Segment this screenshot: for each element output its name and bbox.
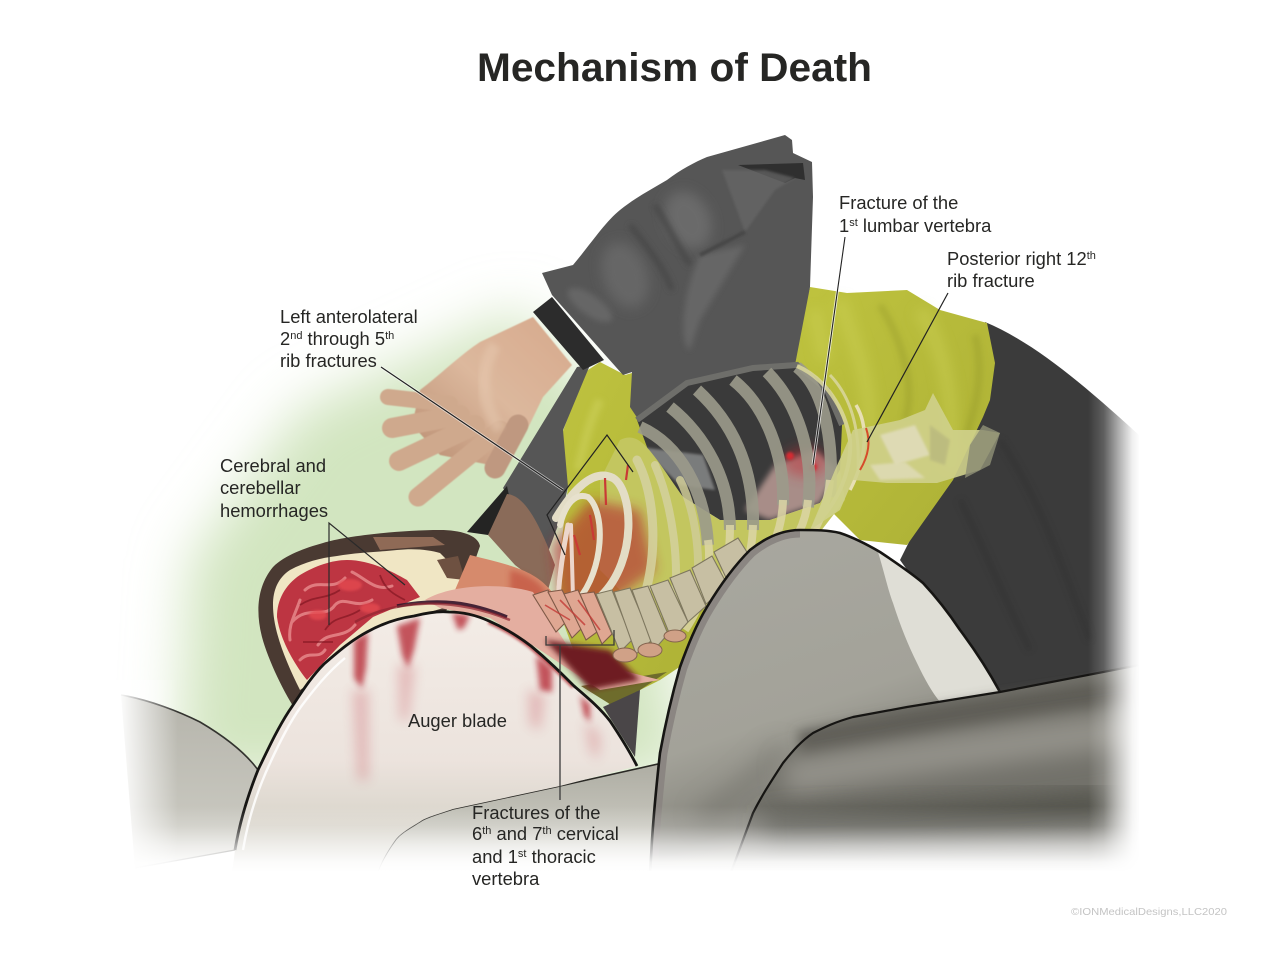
cervical and thoracic spine [425,538,752,690]
leader line: 12th rib [867,293,948,442]
translucent lumbar spine [810,393,1000,530]
label: lumbar vertebra: Fracture of the [839,192,958,213]
left background auger flight [121,695,258,868]
label: lumbar vertebra: lumbar vertebra [858,215,992,236]
translucent posterior rib cage [600,365,864,630]
label: lumbar vertebra: st [849,217,858,229]
farmer's trousers [900,322,1150,700]
leader line: hemorrhages [329,523,405,625]
edge fade overlays [60,300,1240,901]
label: cervical fractures: st [518,848,526,860]
label: 12th rib: Posterior right 12 [947,248,1087,269]
farmer's jacket [467,135,813,590]
label: left ribs: rib fractures [280,350,377,371]
label: hemorrhages: hemorrhages [220,500,328,521]
label: hemorrhages: Cerebral and [220,455,326,476]
right auger blade [650,530,1000,875]
label: auger blade: Auger blade [408,710,507,731]
label: cervical fractures: and 1 [472,846,518,867]
background: soft green glow [178,310,690,780]
title: Mechanism of Death [477,46,872,90]
label: lumbar vertebra: 1 [839,215,849,236]
label: 12th rib: rib fracture [947,270,1035,291]
label: cervical fractures: th [482,825,491,837]
high-visibility vest: back [790,287,995,545]
anterior ribs with fractures [552,460,698,620]
label: cervical fractures: Fractures of the [472,802,600,823]
leader line: lumbar vertebra [813,237,845,465]
label: left ribs: th [385,330,394,342]
label: cervical fractures: and 7 [491,823,542,844]
lower right auger flight [730,663,1150,875]
label: cervical fractures: th [542,825,552,837]
label: left ribs: 2 [280,328,290,349]
label: left ribs: Left anterolateral [280,306,418,327]
leader line: rib fractures [381,367,633,555]
label: left ribs: nd [290,330,302,342]
bottom auger band [378,764,680,880]
copyright: ©IONMedicalDesigns,LLC2020 [1071,906,1227,918]
head with exposed brain [258,530,552,712]
label: left ribs: through 5 [302,328,385,349]
label: 12th rib: th [1087,250,1096,262]
high-visibility vest: front [555,362,720,757]
label: cervical fractures: vertebra [472,868,540,889]
label: hemorrhages: cerebellar [220,477,301,498]
label: cervical fractures: 6 [472,823,482,844]
hand [388,317,572,497]
jacket cuff [533,297,604,370]
auger blade with blood streaks [231,602,637,882]
label: cervical fractures: cervical [552,823,619,844]
label: cervical fractures: thoracic [526,846,596,867]
leader line: vertebra bracket [546,630,614,800]
